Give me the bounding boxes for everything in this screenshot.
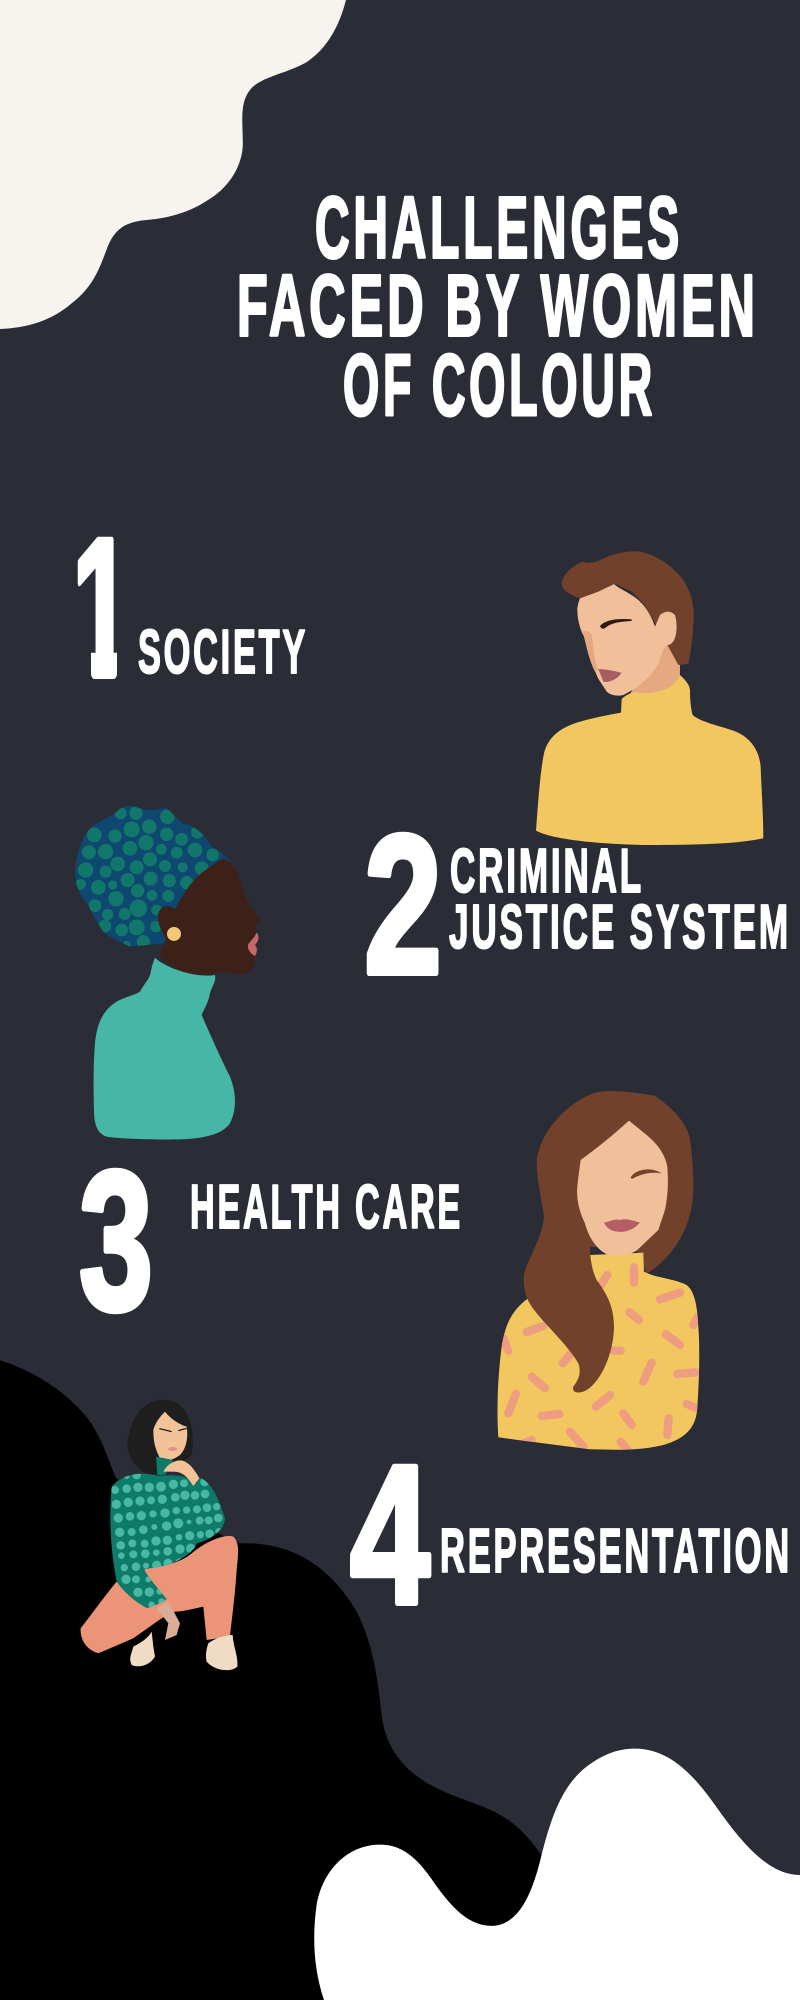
hair	[562, 551, 694, 665]
face	[153, 1412, 187, 1460]
lips	[604, 1219, 640, 1232]
item 3: health care	[79, 1130, 463, 1351]
sweater pattern	[503, 1267, 697, 1451]
sweater dots	[111, 1471, 222, 1608]
head	[158, 858, 260, 975]
hair	[127, 1400, 193, 1475]
number 3: 3	[79, 1130, 153, 1351]
lips	[598, 669, 622, 682]
label: criminal justice system: CRIMINAL	[450, 837, 644, 906]
earring	[167, 927, 181, 941]
blob: bottom-left black	[0, 1360, 561, 2000]
trousers	[81, 1536, 238, 1653]
hair back	[537, 1091, 693, 1273]
item 1: society	[78, 536, 306, 679]
lips	[168, 1447, 177, 1451]
number 2: 2	[364, 794, 442, 1015]
number 1: 1	[72, 497, 132, 718]
item 4: representation	[350, 1424, 792, 1645]
sweater	[110, 1474, 225, 1608]
label: health care: HEALTH CARE	[190, 1173, 463, 1242]
wrist and cuff	[157, 1602, 180, 1640]
hair front lock	[524, 1180, 614, 1393]
label: society: SOCIETY	[138, 618, 308, 687]
eyebrow	[600, 619, 632, 629]
sweater	[536, 675, 763, 845]
blob: top-left cream	[0, 0, 346, 329]
blob: bottom-right white	[314, 1749, 800, 2000]
eyes	[159, 1428, 187, 1432]
lips	[248, 933, 258, 956]
title	[237, 180, 759, 434]
illustration: woman in headwrap	[75, 805, 260, 1140]
hand	[163, 1460, 199, 1486]
illustration: woman with long hair	[497, 1091, 699, 1451]
number 4: 4	[350, 1424, 430, 1645]
face	[577, 584, 677, 696]
sweater	[497, 1253, 699, 1450]
neck shadow	[630, 645, 680, 694]
headwrap spots	[76, 807, 218, 948]
headwrap	[75, 805, 230, 947]
item 2: criminal justice system	[364, 794, 791, 1015]
face shadow	[583, 631, 598, 672]
face	[577, 1121, 668, 1256]
eyebrow	[631, 1169, 662, 1179]
sweater	[94, 958, 235, 1140]
sweater neck	[156, 1457, 173, 1475]
illustration: woman in yellow turtleneck	[536, 551, 763, 845]
shoes	[130, 1632, 237, 1670]
illustration: crouching woman	[81, 1400, 238, 1670]
